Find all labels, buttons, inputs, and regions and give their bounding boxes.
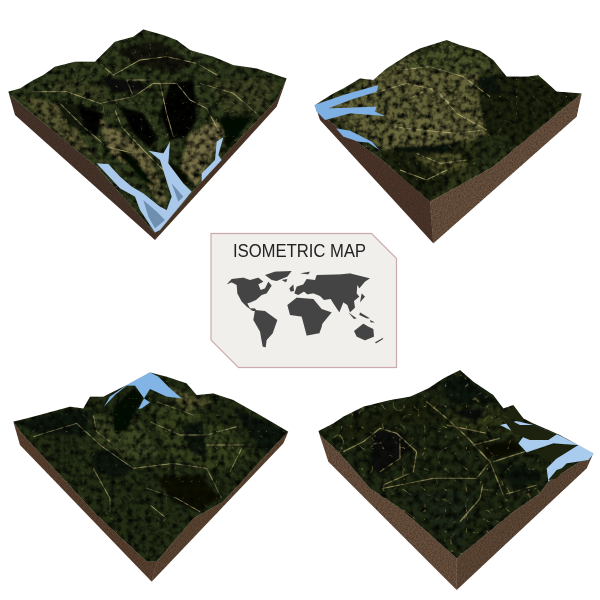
North America <box>227 278 272 311</box>
terrain block: top left <box>8 29 287 240</box>
terrain block: bottom left <box>13 372 288 582</box>
terrain block: top right <box>314 40 582 243</box>
card background <box>211 234 396 368</box>
lake right <box>202 137 223 182</box>
South America <box>253 310 277 347</box>
islands <box>282 272 383 343</box>
lake shallows <box>143 183 183 228</box>
lake lower arm <box>336 128 379 150</box>
Africa <box>287 298 332 336</box>
lake <box>104 372 182 409</box>
terrain block: bottom right <box>318 370 594 590</box>
lake arms <box>314 85 385 120</box>
water <box>500 421 594 482</box>
Greenland <box>265 271 292 281</box>
info card <box>211 234 396 368</box>
ridges over water <box>500 406 578 480</box>
world map <box>227 271 383 347</box>
card title: ISOMETRIC MAP <box>233 240 366 261</box>
Australia <box>354 324 374 340</box>
Eurasia <box>294 273 370 312</box>
lake <box>97 142 192 233</box>
